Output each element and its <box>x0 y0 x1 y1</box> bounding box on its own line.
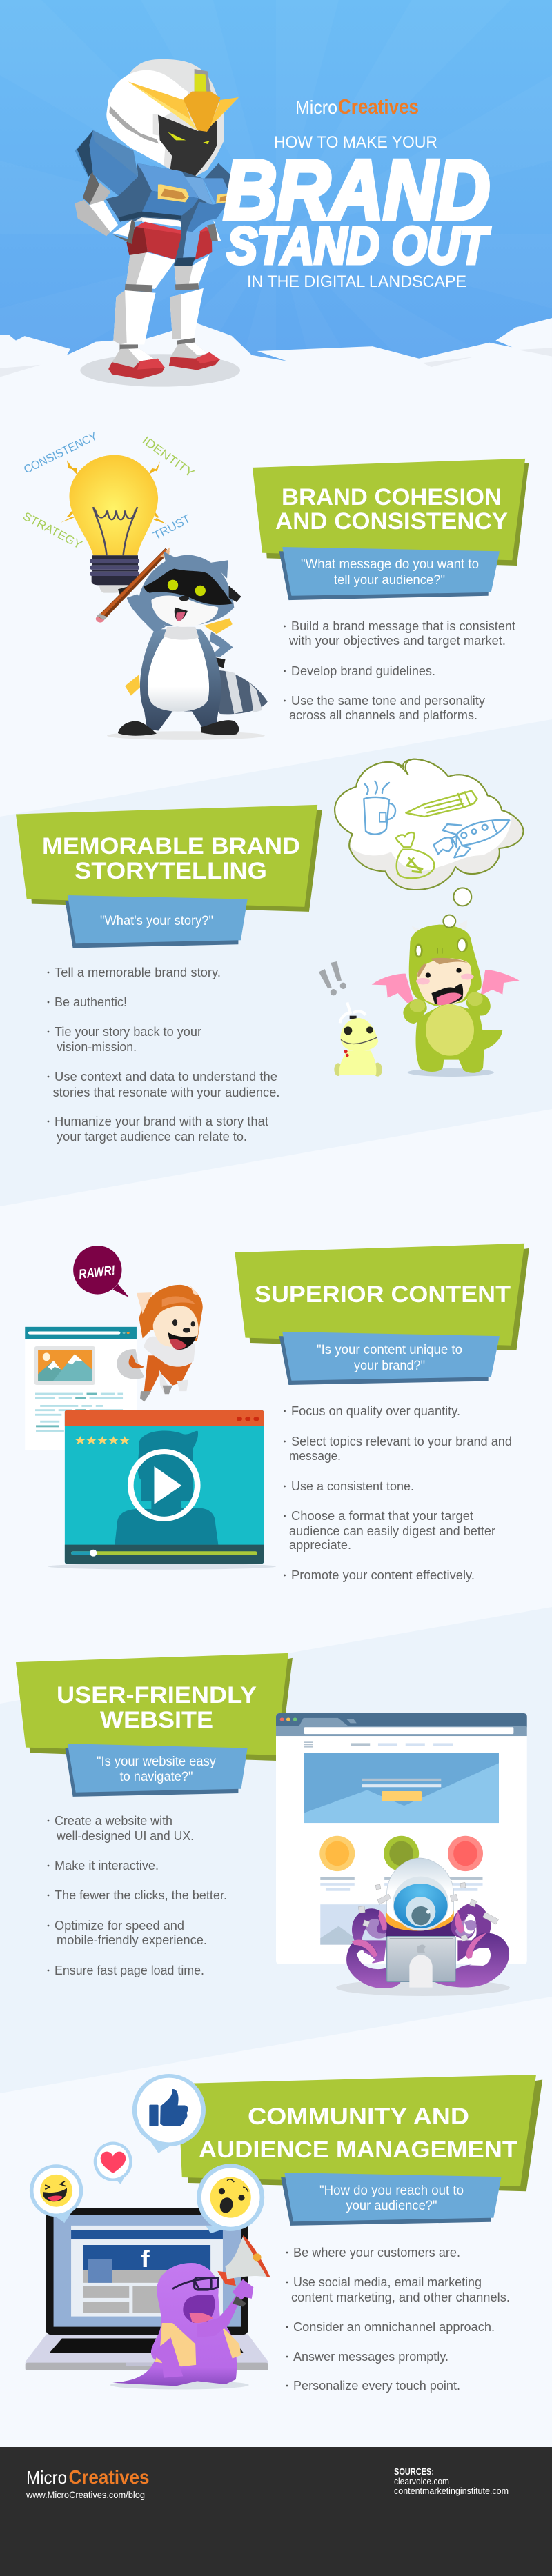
panel: brand cohesion heading <box>253 459 529 600</box>
speech bubble: RAWR: RAWR! <box>78 1264 116 1282</box>
quote text: "What's your story?" <box>100 914 213 928</box>
robot legs and shadow <box>80 252 240 387</box>
bullet list: brand cohesion: Develop brand guidelines. <box>291 664 435 678</box>
bullet list: brand cohesion: Use the same tone and personality <box>291 694 485 708</box>
octopus mascot <box>336 1858 510 1996</box>
wow emoji bubble <box>197 2164 264 2233</box>
hero title block <box>224 94 491 291</box>
heading text: WEBSITE <box>100 1707 213 1733</box>
browser window <box>276 1713 527 1964</box>
fox mascot <box>117 1285 203 1401</box>
subtitle top: HOW TO MAKE YOUR <box>274 133 437 152</box>
green banner <box>235 1244 529 1350</box>
quote text <box>319 2184 464 2213</box>
word CONSISTENCY: CONSISTENCY <box>21 430 99 477</box>
sources <box>394 2466 509 2496</box>
bullet list: website <box>48 1814 227 1977</box>
bullet list: storytelling: Tell a memorable brand story. <box>55 966 221 979</box>
snowy ground <box>0 318 552 415</box>
quote text: "How do you reach out to <box>319 2184 464 2198</box>
panel: community heading <box>178 2075 542 2226</box>
logo: Micro <box>295 97 337 118</box>
heading text: MEMORABLE BRAND <box>42 833 300 859</box>
quote text: to navigate?" <box>120 1770 193 1784</box>
icon: pencil <box>406 791 477 817</box>
blue quote ribbon <box>65 895 248 948</box>
sources: SOURCES: <box>394 2466 434 2477</box>
bullet list: storytelling <box>48 966 279 1144</box>
bullet list: superior content: Select topics relevant to your brand and <box>291 1435 512 1448</box>
bullet list: community <box>286 2246 510 2393</box>
like bubble <box>132 2074 206 2153</box>
heading text: AUDIENCE MANAGEMENT <box>199 2137 518 2163</box>
sources: contentmarketinginstitute.com <box>394 2486 509 2496</box>
bullet list: storytelling: stories that resonate with your audience. <box>52 1086 279 1099</box>
quote text: your brand?" <box>354 1359 425 1373</box>
bullet list: storytelling: vision-mission. <box>57 1040 137 1054</box>
heading text <box>42 833 300 884</box>
blue quote ribbon <box>65 1744 248 1797</box>
speech bubble: RAWR <box>73 1246 129 1297</box>
robot mascot <box>75 59 240 387</box>
bullet list: superior content: message. <box>289 1449 341 1463</box>
hero background: sky with rays <box>0 0 552 717</box>
bullet list: superior content <box>284 1404 512 1582</box>
blue quote ribbon <box>279 547 500 600</box>
bullet list: website: mobile-friendly experience. <box>57 1933 207 1947</box>
bullet list: website: Ensure fast page load time. <box>55 1964 204 1977</box>
bullet list: superior content: Choose a format that your target <box>291 1509 473 1523</box>
bullet list: website: Make it interactive. <box>55 1859 159 1873</box>
heading text: STORYTELLING <box>75 858 267 884</box>
quote text: "Is your content unique to <box>317 1343 462 1357</box>
bullet list: superior content: audience can easily digest and better <box>289 1524 495 1538</box>
icon: mug <box>364 781 395 835</box>
bullet list: community: content marketing, and other channels. <box>291 2290 510 2304</box>
bullet list: storytelling: Humanize your brand with a story that <box>55 1115 268 1128</box>
voodoo doll <box>334 1002 382 1077</box>
bullet list: brand cohesion: with your objectives and target market. <box>288 634 506 648</box>
bullet list: brand cohesion <box>284 619 515 722</box>
thought bubbles <box>453 888 471 906</box>
title BRAND: BRAND <box>224 143 490 237</box>
bullet list: community: Answer messages promptly. <box>293 2350 448 2364</box>
panel: superior content heading <box>235 1244 529 1385</box>
blue quote ribbon <box>279 1332 500 1385</box>
bullet list: community: Personalize every touch point. <box>293 2379 460 2393</box>
bullet list: superior content: Promote your content effectively. <box>291 1568 475 1582</box>
raccoon mascot <box>96 548 268 740</box>
footer logo <box>26 2466 149 2488</box>
footer logo: Creatives <box>69 2466 149 2488</box>
title STAND OUT: STAND OUT <box>227 217 491 274</box>
bullet list: superior content: Focus on quality over quantity. <box>291 1404 460 1418</box>
green banner <box>178 2075 542 2191</box>
bullet list: community: Use social media, email marketing <box>293 2275 482 2289</box>
heading text <box>199 2104 518 2163</box>
bullet list: website: The fewer the clicks, the better. <box>55 1888 227 1902</box>
logo <box>295 94 419 119</box>
bullet list: storytelling: Use context and data to understand the <box>55 1070 277 1084</box>
icon: rocket <box>433 820 509 857</box>
bullet list: community: Consider an omnichannel approach. <box>293 2320 495 2334</box>
bullet list: storytelling: your target audience can relate to. <box>57 1130 247 1144</box>
laughing emoji bubble <box>30 2164 83 2223</box>
thought cloud <box>335 759 523 906</box>
heading text <box>275 484 508 535</box>
quote text <box>97 1755 216 1784</box>
sources: clearvoice.com <box>394 2476 449 2486</box>
word IDENTITY: IDENTITY <box>140 434 197 480</box>
footer <box>0 2447 552 2576</box>
laptop with facebook page <box>26 2208 268 2370</box>
page background with diagonal bands <box>0 414 552 2448</box>
quote text <box>317 1343 462 1373</box>
green banner <box>253 459 529 566</box>
footer logo: Micro <box>26 2467 67 2488</box>
heart bubble <box>94 2141 132 2184</box>
video player <box>48 1410 276 1570</box>
bullet list: website: Create a website with <box>55 1814 172 1828</box>
blue quote ribbon <box>281 2173 502 2226</box>
heading text <box>57 1682 257 1733</box>
quote text: "What message do you want to <box>301 557 479 572</box>
bullet list: website: well-designed UI and UX. <box>56 1829 194 1843</box>
dragon costume kid <box>372 915 520 1077</box>
heading text: BRAND COHESION <box>282 484 502 510</box>
bullet list: brand cohesion: Build a brand message that is consistent <box>291 619 515 633</box>
light bulb illustration <box>21 430 197 593</box>
green banner <box>16 1653 293 1761</box>
robot helmet, torso and arms <box>75 59 239 266</box>
bullet list: storytelling: Tie your story back to your <box>55 1025 201 1039</box>
subtitle bottom: IN THE DIGITAL LANDSCAPE <box>247 272 466 291</box>
exclamation marks <box>319 961 346 995</box>
purple megaphone mascot <box>110 2235 270 2390</box>
heading text: AND CONSISTENCY <box>275 508 508 535</box>
bullet list: superior content: Use a consistent tone. <box>291 1479 414 1493</box>
video player: ★★★★★ <box>74 1434 131 1446</box>
heading text: SUPERIOR CONTENT <box>255 1281 511 1308</box>
word TRUST: TRUST <box>151 512 193 543</box>
heading text: COMMUNITY AND <box>248 2104 469 2130</box>
word STRATEGY: STRATEGY <box>21 510 84 552</box>
panel: storytelling heading <box>16 805 322 948</box>
bullet list: storytelling: Be authentic! <box>55 995 127 1009</box>
article document page <box>25 1327 137 1450</box>
icon: money bag <box>396 832 434 878</box>
laptop with facebook page: f <box>141 2245 150 2273</box>
bullet list: brand cohesion: across all channels and platforms. <box>289 708 477 722</box>
bullet list: website: Optimize for speed and <box>55 1919 184 1933</box>
footer url: www.MicroCreatives.com/blog <box>26 2489 145 2500</box>
panel: user-friendly website heading <box>16 1653 293 1797</box>
bulb <box>61 455 166 593</box>
green banner <box>16 805 322 912</box>
bullet list: superior content: appreciate. <box>289 1538 351 1552</box>
heading text: USER-FRIENDLY <box>57 1682 257 1708</box>
quote text: tell your audience?" <box>334 573 445 588</box>
quote text: "Is your website easy <box>97 1755 216 1769</box>
logo: Creatives <box>338 94 419 119</box>
bullet list: community: Be where your customers are. <box>293 2246 460 2259</box>
quote text: your audience?" <box>346 2199 437 2213</box>
quote text <box>301 557 479 588</box>
